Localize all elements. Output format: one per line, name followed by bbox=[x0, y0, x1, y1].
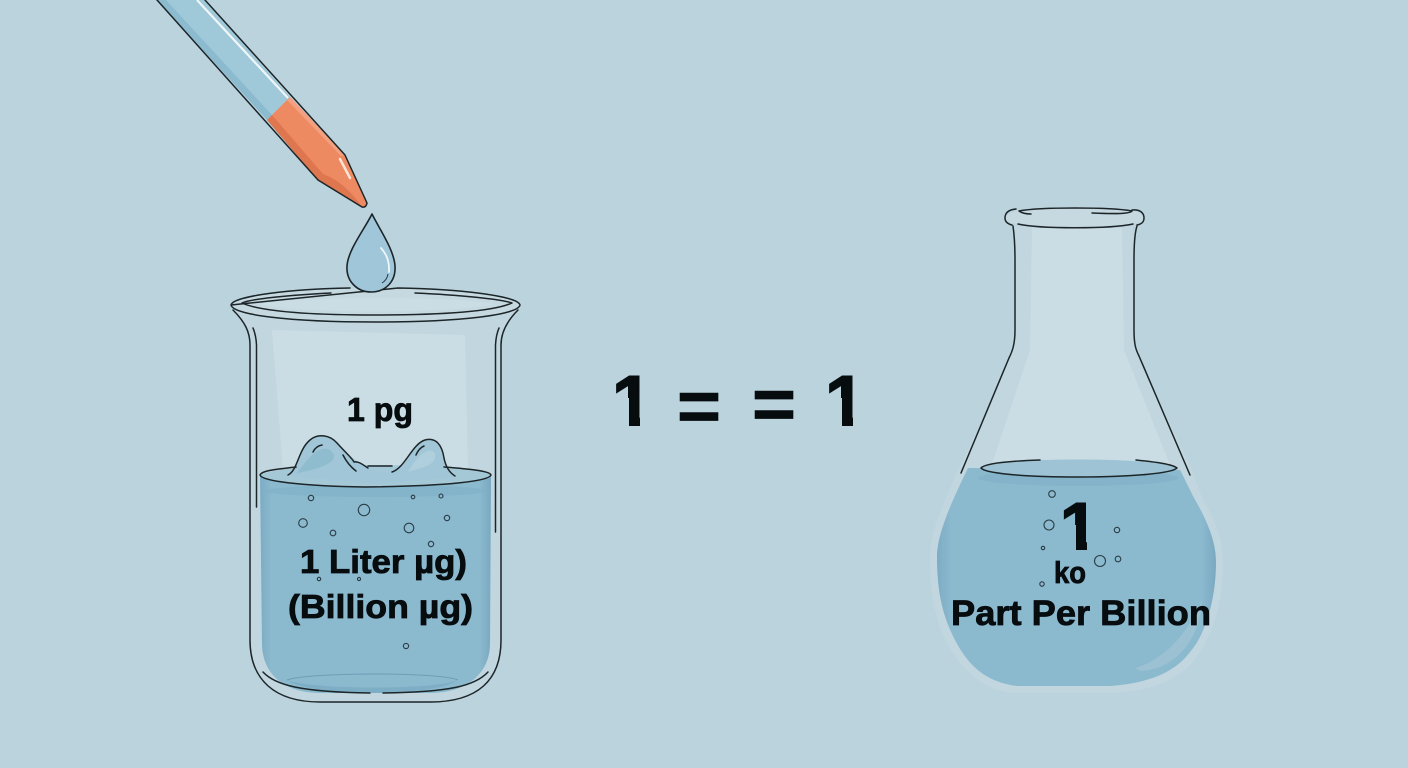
label: 1 Liter µg): 1 Liter µg) bbox=[300, 543, 467, 580]
right number: 1 bbox=[825, 362, 865, 442]
flask rim bbox=[1005, 207, 1144, 228]
beaker outlines bbox=[231, 288, 520, 702]
water splash bbox=[288, 436, 456, 484]
equation: 1 = = 1 bbox=[616, 376, 853, 426]
label: 1: 1 bbox=[1060, 489, 1098, 565]
infographic canvas bbox=[156, 0, 1216, 703]
beaker rim bbox=[231, 288, 520, 322]
panel: flask bbox=[930, 207, 1223, 693]
flask bubbles bbox=[1040, 491, 1121, 586]
flask glass bbox=[930, 226, 1223, 693]
pipette barrel bbox=[157, 0, 290, 120]
flask water bbox=[937, 468, 1216, 686]
label: (Billion µg): (Billion µg) bbox=[288, 588, 473, 625]
water body bbox=[260, 476, 491, 693]
label: ko: ko bbox=[1054, 555, 1086, 590]
water surface bbox=[261, 465, 491, 487]
beaker bottom ellipse bbox=[287, 674, 458, 680]
label: Part Per Billion: Part Per Billion bbox=[951, 594, 1211, 633]
pipette orange tip bbox=[267, 97, 367, 207]
beaker bubbles bbox=[299, 494, 450, 649]
pipette bbox=[157, 0, 367, 207]
flask water surface bbox=[980, 460, 1176, 476]
icon: water drop bbox=[347, 214, 395, 292]
flask outlines bbox=[961, 208, 1190, 477]
label: 1 pg: 1 pg bbox=[347, 391, 413, 428]
panel: beaker bbox=[231, 288, 520, 702]
first equals sign: = bbox=[677, 367, 721, 447]
left number: 1 bbox=[612, 362, 652, 442]
pipette outline bbox=[157, 0, 367, 207]
beaker glass bbox=[233, 310, 518, 702]
water surface outline bbox=[260, 466, 491, 487]
second equals sign: = bbox=[752, 365, 796, 445]
